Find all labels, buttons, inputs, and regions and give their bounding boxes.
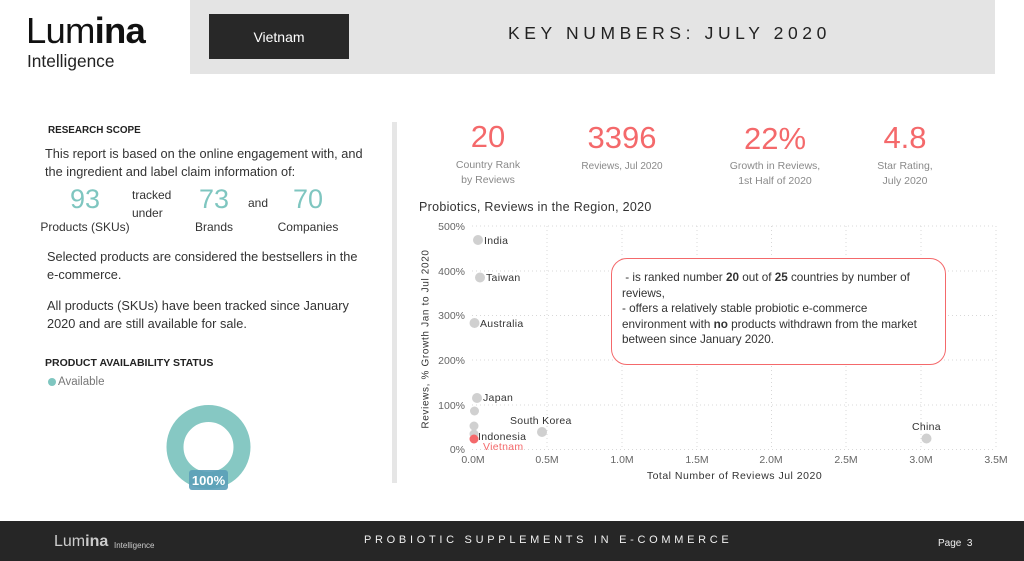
kpi: star rating: July 2020 <box>883 175 927 187</box>
page title: KEY NUMBERS: JULY 2020 <box>508 23 831 43</box>
footer logo: Intelligence <box>114 541 154 550</box>
x axis: 0.0M <box>461 454 485 466</box>
kpi: star rating: 4.8 <box>883 120 927 155</box>
callout: environment with no products withdrawn from the market <box>622 318 917 331</box>
kpi: growth: Growth in Reviews, <box>730 160 820 172</box>
y axis: 100% <box>438 400 465 412</box>
text: tracked under <box>132 188 171 220</box>
footer logo <box>54 533 154 550</box>
stat: brands: 73 <box>199 184 229 214</box>
intro text <box>45 146 363 179</box>
callout: reviews, <box>622 287 665 300</box>
x axis: 3.5M <box>984 454 1008 466</box>
y axis: 300% <box>438 310 465 322</box>
text: tracked under: under <box>132 206 163 220</box>
text: and: and <box>248 196 268 210</box>
data labels: China <box>912 421 941 433</box>
callout: - offers a relatively stable probiotic e-commerce <box>622 302 867 315</box>
kpi: reviews <box>581 120 663 172</box>
kpi: country rank: Country Rank <box>456 158 520 170</box>
x axis: 0.5M <box>535 454 559 466</box>
data labels: Vietnam <box>483 441 523 453</box>
logo: Lumina Intelligence: Intelligence <box>27 50 114 70</box>
callout <box>611 258 946 365</box>
y axis: 0% <box>450 444 465 456</box>
stat: companies: 70 <box>293 184 323 214</box>
x axis: 2.5M <box>834 454 858 466</box>
y axis: 400% <box>438 266 465 278</box>
data points <box>470 235 932 444</box>
kpi: growth: 1st Half of 2020 <box>738 175 812 187</box>
heading: product availability status: PRODUCT AVAILABILITY STATUS <box>45 356 213 368</box>
x axis: 3.0M <box>909 454 933 466</box>
heading: research scope: RESEARCH SCOPE <box>48 125 141 136</box>
country selector: Vietnam: Vietnam <box>253 29 305 45</box>
text: tracking period: All products (SKUs) have been tracked since January <box>47 298 349 313</box>
data labels: India <box>484 235 508 247</box>
y axis: 500% <box>438 221 465 233</box>
stat: products <box>40 184 130 234</box>
y axis: 200% <box>438 355 465 367</box>
y axis title: Reviews, % Growth Jan to Jul 2020 <box>420 249 432 429</box>
intro text: This report is based on the online engagement with, and <box>45 146 363 161</box>
kpi: growth <box>730 121 820 187</box>
intro text: the ingredient and label claim information of: <box>45 164 295 179</box>
text: tracking period: 2020 and are still available for sale. <box>47 316 247 331</box>
kpi: reviews: 3396 <box>588 120 656 155</box>
y axis <box>438 221 465 456</box>
kpi: country rank <box>456 119 520 186</box>
callout: - is ranked number 20 out of 25 countries by number of <box>625 271 910 284</box>
x axis title: Total Number of Reviews Jul 2020 <box>647 470 822 482</box>
text: tracked under: tracked <box>132 188 171 202</box>
scatter chart <box>420 221 1008 482</box>
data labels <box>478 235 941 453</box>
logo: Lumina Intelligence <box>26 10 146 70</box>
panel: research scope <box>40 125 363 388</box>
header band <box>190 0 995 74</box>
kpi: star rating <box>877 120 933 187</box>
x axis: 1.0M <box>610 454 634 466</box>
stat: companies: Companies <box>278 220 338 234</box>
vertical divider <box>392 122 397 483</box>
logo: Lumina Intelligence: Lumina <box>26 10 145 51</box>
page number: Page 3 <box>938 538 972 548</box>
footer title: PROBIOTIC SUPPLEMENTS IN E-COMMERCE <box>364 534 732 546</box>
donut chart: 100% available: 100% <box>192 473 226 488</box>
stat: products: Products (SKUs) <box>40 220 130 234</box>
kpi: country rank: by Reviews <box>461 174 515 186</box>
stat: products: 93 <box>70 184 100 214</box>
legend: available: Available <box>58 376 104 388</box>
kpi: reviews: Reviews, Jul 2020 <box>581 161 663 172</box>
text: bestsellers: Selected products are considered the bestsellers in the <box>47 249 357 264</box>
chart heading: Probiotics, Reviews in the Region, 2020 <box>419 200 652 214</box>
country selector: Vietnam <box>209 14 349 59</box>
callout: between since January 2020. <box>622 333 774 346</box>
x axis: 1.5M <box>685 454 709 466</box>
data labels: South Korea <box>510 415 572 427</box>
x axis <box>461 454 1008 466</box>
kpi: country rank: 20 <box>471 119 505 154</box>
text: bestsellers <box>47 249 357 282</box>
footer logo: Lumina <box>54 533 108 550</box>
donut chart: 100% available <box>166 405 250 490</box>
footer bar <box>0 521 1024 561</box>
data labels: Indonesia <box>478 431 526 443</box>
text: bestsellers: e-commerce. <box>47 266 121 282</box>
text: tracking period <box>47 298 349 331</box>
x axis: 2.0M <box>759 454 783 466</box>
stat: brands <box>195 184 233 234</box>
kpi: growth: 22% <box>744 121 806 156</box>
kpi: star rating: Star Rating, <box>877 160 933 172</box>
data labels: Japan <box>483 392 513 404</box>
data labels: Taiwan <box>486 272 520 284</box>
data labels: Australia <box>480 318 524 330</box>
stat: companies <box>278 184 338 234</box>
stat: brands: Brands <box>195 220 233 234</box>
data point: Vietnam <box>470 434 478 444</box>
